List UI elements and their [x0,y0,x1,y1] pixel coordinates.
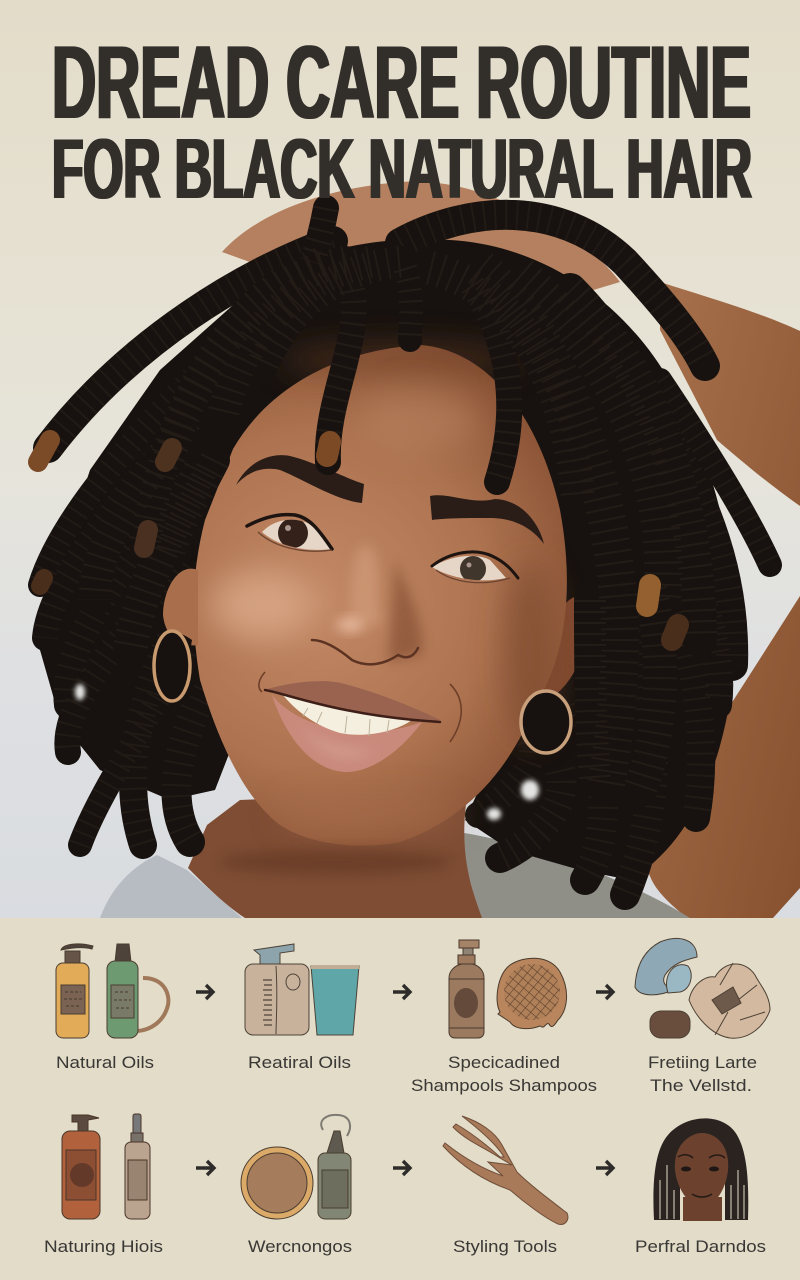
label [648,1053,757,1095]
title [52,25,752,217]
shirt right [457,832,690,918]
label line 1: Specicadined [448,1053,560,1072]
neck [188,790,482,918]
eye left [247,515,332,551]
icon: pump box and cup [245,944,359,1035]
arrow [596,985,613,999]
icon: shampoo and brush [449,940,567,1038]
smile creases [259,672,461,742]
front locs [95,208,700,790]
brow left [236,455,364,503]
brown loc tips [40,442,678,640]
label: Naturing Hiois [44,1237,163,1256]
nose [312,545,422,664]
arrow [196,985,213,999]
ear right [525,597,588,705]
back loc texture [40,215,770,895]
photo: woman with locs [38,181,800,918]
loc tip left [38,440,50,462]
back locs [40,215,770,895]
eye right [432,552,518,583]
face [194,345,567,846]
face light [212,346,556,831]
label: Styling Tools [453,1237,557,1256]
earring left [154,631,195,701]
shirt left [100,855,242,918]
hand on head [222,181,620,300]
label line 2: The Vellstd. [650,1076,752,1095]
label [411,1053,597,1095]
back hair mass [40,239,736,880]
label: Perfral Darndos [635,1237,766,1256]
icon: cap, hand and comb [635,938,770,1038]
gaps between locs [75,592,701,820]
label: Natural Oils [56,1053,154,1072]
mouth [264,681,440,772]
panel: product steps [0,918,800,1280]
arrow [596,1161,613,1175]
arrow [393,1161,410,1175]
brow right [430,495,544,544]
earring right [521,691,571,753]
label line 2: Shampools Shampoos [411,1076,597,1095]
arrow [196,1161,214,1175]
arrow [393,985,410,999]
neck shadow [220,850,450,874]
icon: natural oil bottles [56,944,168,1038]
label: Wercnongos [248,1237,352,1256]
icon: portrait with locs [653,1118,748,1221]
icon: wooden styling fork [443,1116,568,1224]
label line 1: Fretiing Larte [648,1053,757,1072]
icon: round compact and bottle [241,1115,351,1219]
ear left [163,569,198,645]
icon: terracotta bottle and spray [62,1114,150,1219]
arm: raised right arm [644,282,800,918]
photo background [0,0,800,920]
label: Reatiral Oils [248,1053,351,1072]
front loc texture [95,208,700,790]
